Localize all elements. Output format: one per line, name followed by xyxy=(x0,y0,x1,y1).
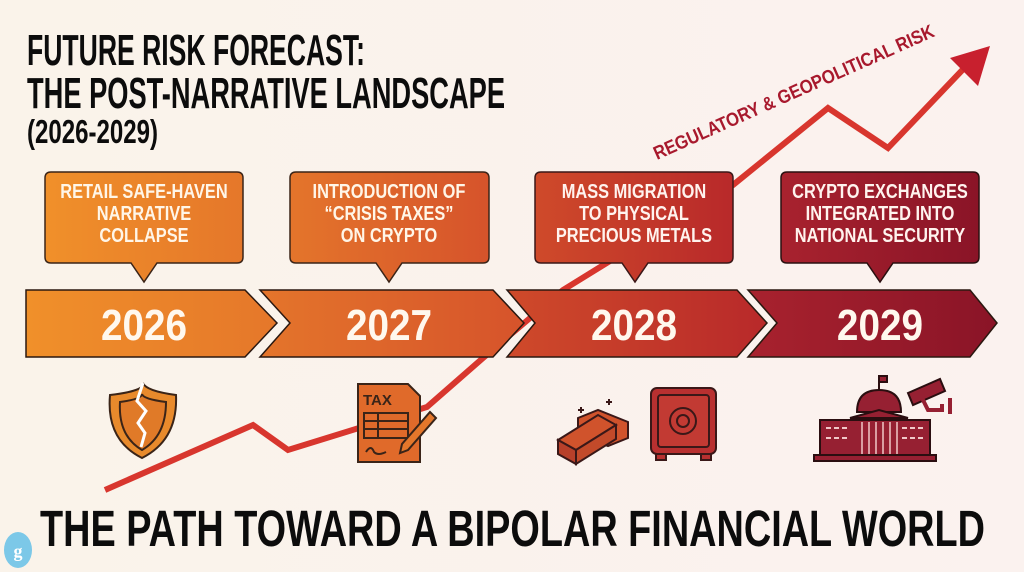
icon: gold bars xyxy=(558,399,628,464)
logo badge xyxy=(4,532,32,568)
segment 2028: 2028 xyxy=(591,300,677,350)
callout: 2027 xyxy=(290,172,489,282)
logo badge: g xyxy=(14,541,22,561)
callout: 2029: INTEGRATED INTO xyxy=(806,201,954,224)
callout: 2029: NATIONAL SECURITY xyxy=(795,223,965,246)
callout: 2028: TO PHYSICAL xyxy=(579,201,689,224)
callout: 2026: COLLAPSE xyxy=(99,223,189,246)
callout: 2029 xyxy=(781,172,979,282)
segment 2029 xyxy=(748,290,997,357)
segment 2027 xyxy=(260,290,524,357)
title: FUTURE RISK FORECAST: xyxy=(27,26,365,75)
trend line: regulatory & geopolitical risk xyxy=(105,46,990,490)
callout: 2027: “CRISIS TAXES” xyxy=(325,201,453,224)
callout: 2027: ON CRYPTO xyxy=(341,223,437,246)
callout: 2026 xyxy=(45,172,243,282)
segment 2026 xyxy=(26,290,277,357)
callout: 2028: PRECIOUS METALS xyxy=(556,223,712,246)
title: (2026-2029) xyxy=(27,113,158,150)
label: regulatory & geopolitical risk: REGULATORY & GEOPOLITICAL RISK xyxy=(650,21,938,165)
segment 2026: 2026 xyxy=(101,300,187,350)
callout: 2027: INTRODUCTION OF xyxy=(313,179,465,202)
callout: 2028: MASS MIGRATION xyxy=(562,179,706,202)
icon: safe xyxy=(651,388,716,460)
callout: 2026: NARRATIVE xyxy=(97,201,191,224)
callout: 2026: RETAIL SAFE-HAVEN xyxy=(60,179,228,202)
icon: tax document xyxy=(358,384,436,462)
segment 2029: 2029 xyxy=(837,300,923,350)
title: THE POST-NARRATIVE LANDSCAPE xyxy=(27,69,505,118)
segment 2028 xyxy=(507,290,767,357)
timeline bar xyxy=(26,290,997,357)
callout: 2028 xyxy=(535,172,733,282)
segment 2027: 2027 xyxy=(346,300,432,350)
title xyxy=(27,26,505,150)
icon: capitol and camera xyxy=(814,376,950,461)
icon: broken shield xyxy=(110,383,176,458)
icon: tax document: TAX xyxy=(363,392,392,409)
callout: 2029: CRYPTO EXCHANGES xyxy=(792,179,968,202)
